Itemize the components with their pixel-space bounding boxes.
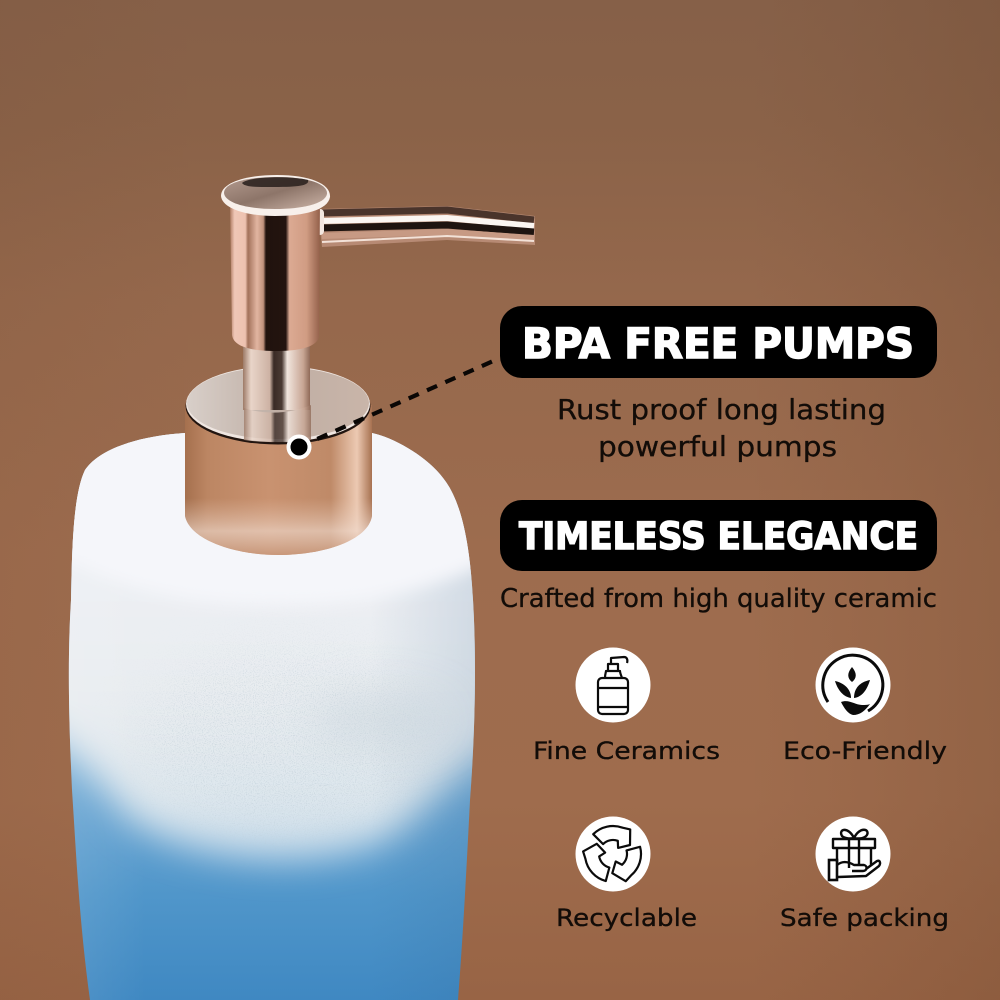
soap dispenser bottle body bbox=[68, 433, 475, 1000]
label: Fine Ceramics bbox=[533, 737, 720, 765]
text: ceramic description: Crafted from high quality ceramic bbox=[500, 584, 937, 614]
heading pill: TIMELESS ELEGANCE bbox=[500, 500, 937, 571]
pump spout bbox=[316, 206, 535, 247]
label: Recyclable bbox=[556, 904, 697, 932]
pump stem bbox=[243, 345, 311, 442]
heading pill: TIMELESS ELEGANCE: TIMELESS ELEGANCE bbox=[519, 515, 918, 558]
label: Eco-Friendly bbox=[783, 737, 947, 765]
heading pill: BPA FREE PUMPS bbox=[500, 306, 937, 378]
feature: Eco-Friendly bbox=[783, 648, 947, 765]
icon: recycling arrows bbox=[576, 816, 650, 892]
pump head bbox=[221, 175, 330, 351]
feature: Fine Ceramics bbox=[533, 648, 720, 765]
icon: leaves in hand bbox=[816, 648, 890, 722]
pump collar bbox=[185, 366, 372, 555]
label: Safe packing bbox=[780, 904, 949, 932]
feature: Safe packing bbox=[780, 816, 949, 932]
callout connector dashed line bbox=[299, 358, 500, 447]
heading pill: BPA FREE PUMPS: BPA FREE PUMPS bbox=[522, 319, 914, 368]
icon: gift on hand bbox=[816, 816, 890, 892]
icon: pump bottle bbox=[576, 648, 650, 722]
feature: Recyclable bbox=[556, 816, 697, 932]
text: pump description: powerful pumps bbox=[598, 430, 837, 463]
text: pump description bbox=[557, 393, 886, 463]
soap pump bbox=[185, 175, 535, 555]
callout dot bbox=[288, 436, 310, 458]
text: pump description: Rust proof long lasting bbox=[557, 393, 886, 426]
